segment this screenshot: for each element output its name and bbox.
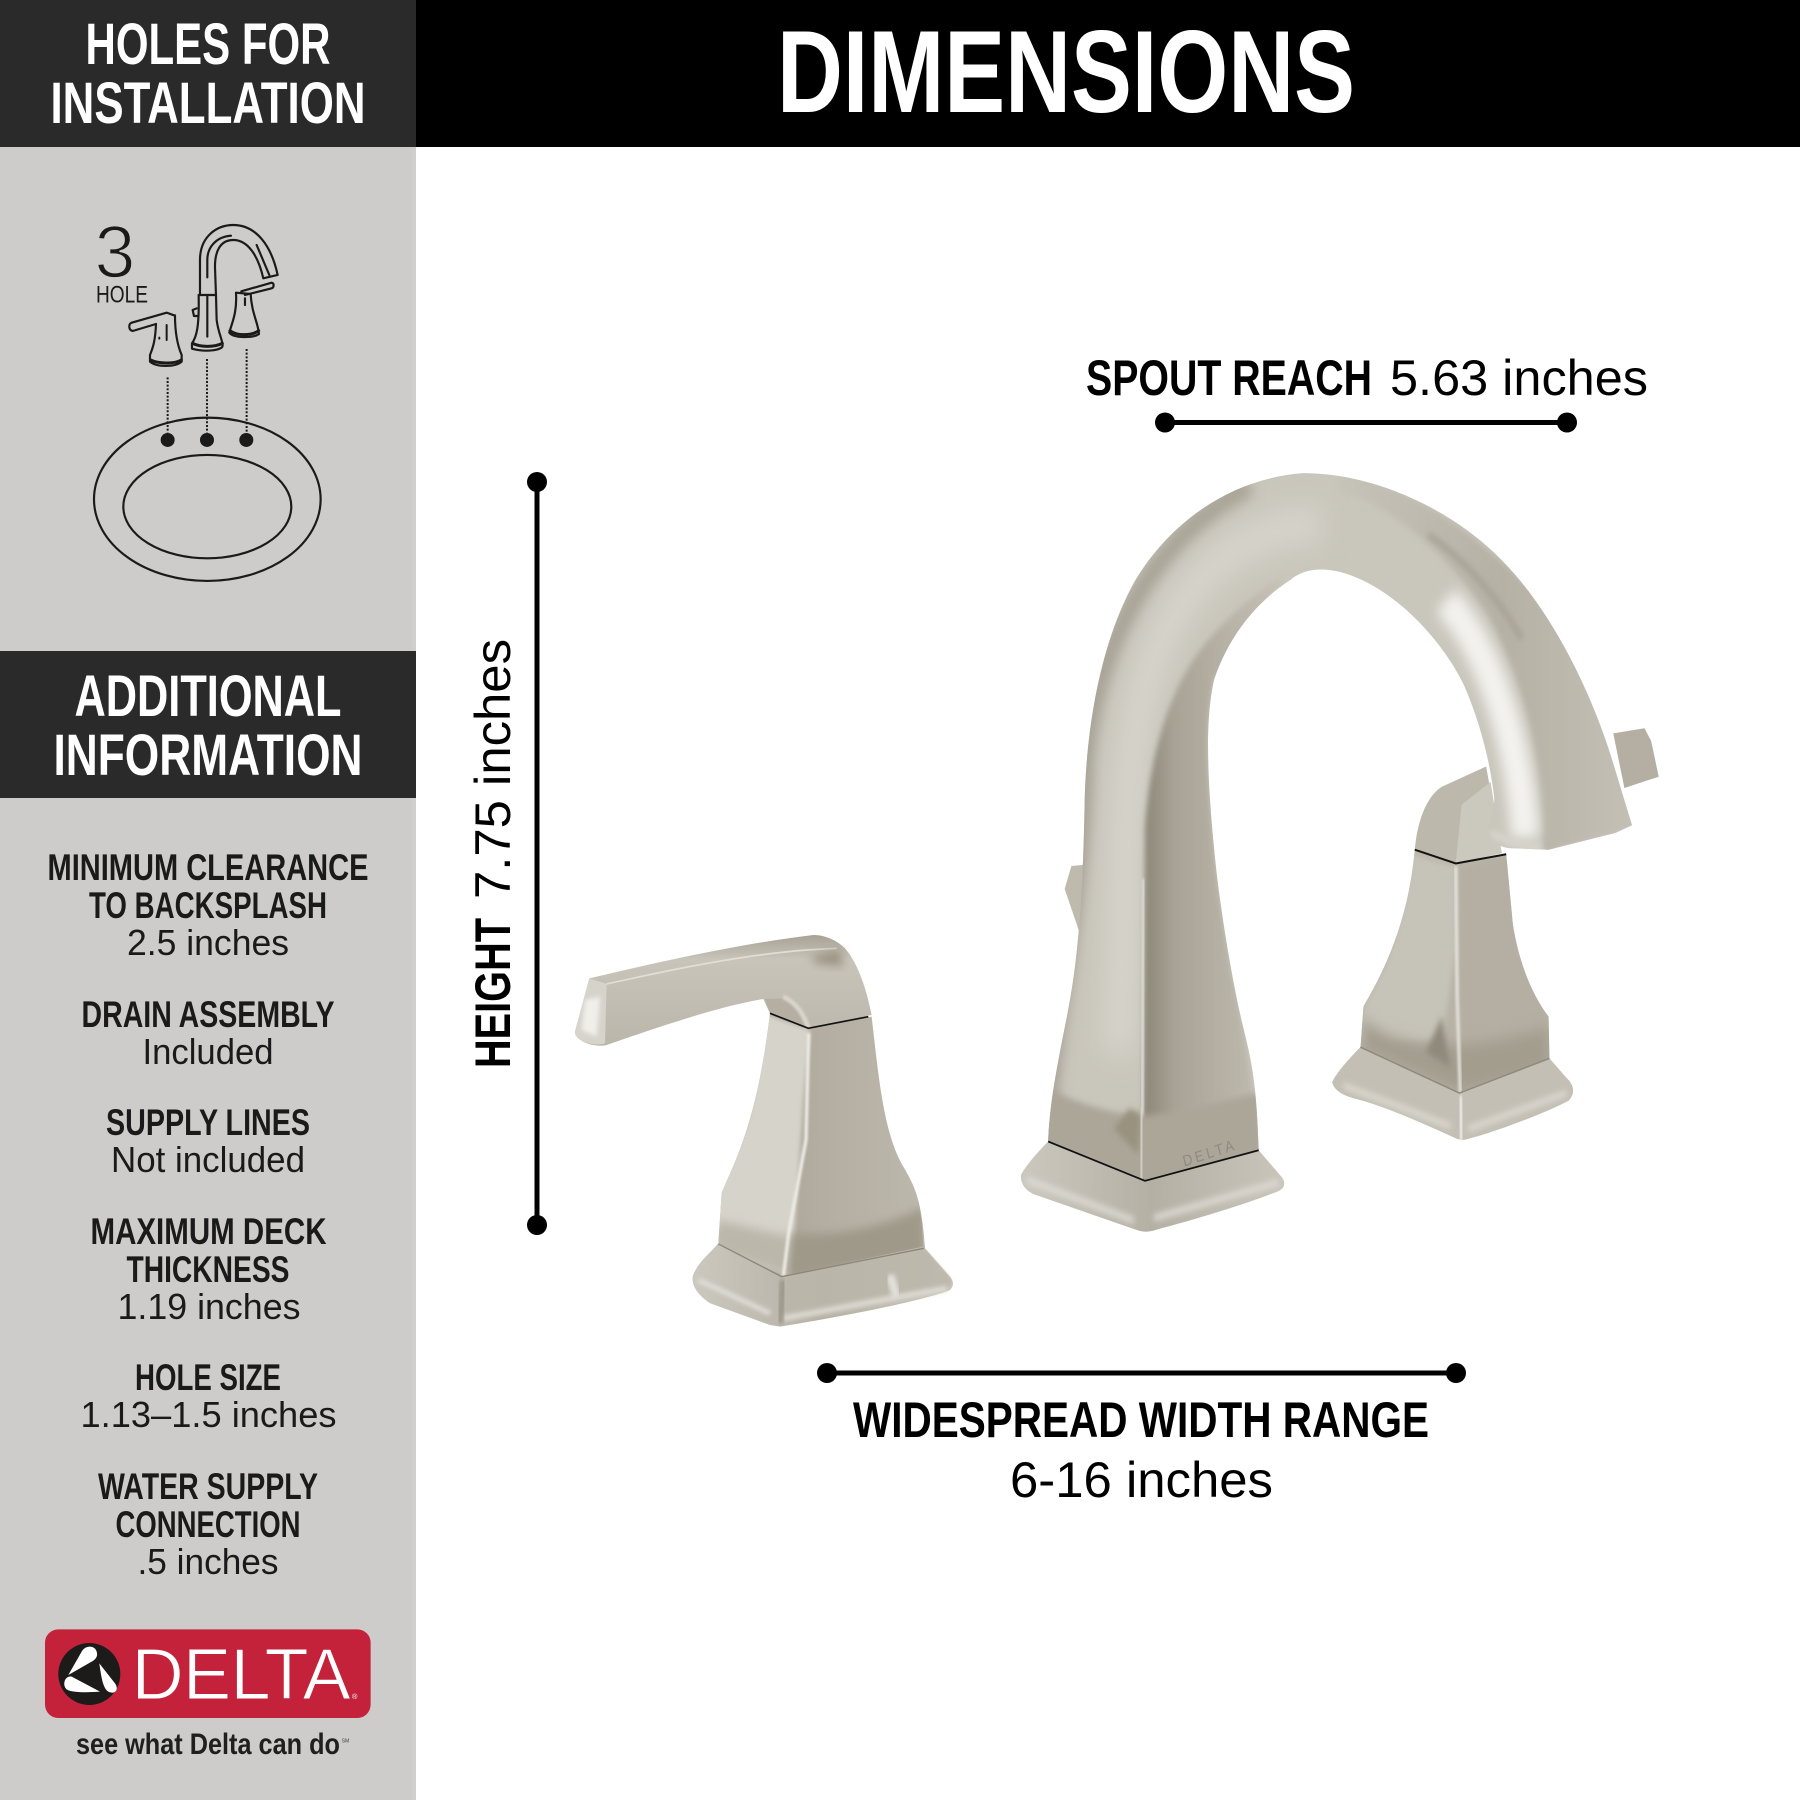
dimension: height — [465, 472, 547, 1235]
spec: minimum clearance: 2.5 inches — [127, 922, 289, 963]
spec: maximum deck thickness: MAXIMUM DECK — [90, 1211, 327, 1252]
spec: hole size: 1.13–1.5 inches — [80, 1394, 336, 1435]
dimension: spout reach — [1086, 350, 1648, 432]
left edge shadow — [1045, 486, 1250, 1144]
spec: minimum clearance — [48, 847, 368, 963]
header: additional information: INFORMATION — [54, 723, 362, 788]
right handle body — [1332, 850, 1573, 1140]
ridge shade — [1428, 534, 1522, 639]
logo: Delta — [45, 1629, 371, 1761]
faucet logo text: DELTA — [1181, 1138, 1236, 1171]
spec: hole size — [80, 1357, 336, 1435]
title: dimensions — [416, 0, 1800, 147]
base band — [1045, 1088, 1261, 1185]
spec: supply lines — [106, 1102, 310, 1180]
spec: drain assembly: Included — [142, 1031, 274, 1072]
header: holes for installation: HOLES FOR — [86, 12, 330, 77]
spec: maximum deck thickness — [90, 1211, 327, 1327]
dimension: widespread width range: WIDESPREAD WIDTH RANGE — [853, 1392, 1429, 1448]
spec: water supply connection: .5 inches — [138, 1541, 278, 1582]
dimension: height: 7.75 inches — [465, 639, 521, 899]
back lever right — [1613, 728, 1659, 788]
spec: water supply connection — [98, 1466, 318, 1582]
spec: maximum deck thickness: 1.19 inches — [118, 1286, 300, 1327]
dimension: widespread width range: 6-16 inches — [1010, 1452, 1273, 1508]
icon: three hole sink diagram — [94, 211, 321, 581]
logo: Delta: SM — [342, 1739, 349, 1745]
icon: three hole sink diagram: HOLE — [96, 282, 148, 308]
dimension: height: HEIGHT — [465, 918, 521, 1068]
dimension: spout reach: 5.63 inches — [1390, 350, 1648, 406]
outer facet — [1339, 471, 1638, 853]
spec: water supply connection: WATER SUPPLY — [98, 1466, 318, 1507]
logo: Delta: see what Delta can do — [76, 1728, 340, 1761]
logo: Delta: ® — [352, 1692, 358, 1701]
right handle lever — [1415, 767, 1502, 863]
spec: supply lines: Not included — [111, 1139, 305, 1180]
spec: drain assembly: DRAIN ASSEMBLY — [82, 994, 335, 1035]
bright highlight — [1446, 601, 1525, 838]
inner facet — [1140, 590, 1276, 1150]
title: dimensions: DIMENSIONS — [777, 6, 1355, 137]
faucet: left handle — [575, 935, 953, 1327]
spout base flange — [1021, 1142, 1284, 1232]
spec: maximum deck thickness: THICKNESS — [126, 1249, 290, 1290]
spec: water supply connection: CONNECTION — [116, 1504, 300, 1545]
faucet: spout and right handle — [1021, 471, 1659, 1232]
upper-left light — [1118, 524, 1321, 1052]
header: holes for installation — [0, 0, 416, 147]
spout body — [1048, 473, 1632, 1181]
dimension: spout reach: SPOUT REACH — [1086, 350, 1372, 406]
back lever left — [1065, 864, 1087, 943]
icon: three hole sink diagram: 3 — [95, 211, 135, 294]
spec: hole size: HOLE SIZE — [135, 1357, 281, 1398]
dimension: widespread width range — [817, 1363, 1466, 1508]
spec: minimum clearance: TO BACKSPLASH — [89, 885, 327, 926]
header: additional information — [0, 651, 416, 798]
spec: supply lines: SUPPLY LINES — [106, 1102, 310, 1143]
sidebar panel — [0, 147, 416, 1800]
logo: Delta: DELTA — [132, 1635, 351, 1715]
header: holes for installation: INSTALLATION — [50, 71, 366, 136]
header: additional information: ADDITIONAL — [74, 664, 342, 729]
spec: drain assembly — [82, 994, 335, 1072]
spec: minimum clearance: MINIMUM CLEARANCE — [48, 847, 368, 888]
